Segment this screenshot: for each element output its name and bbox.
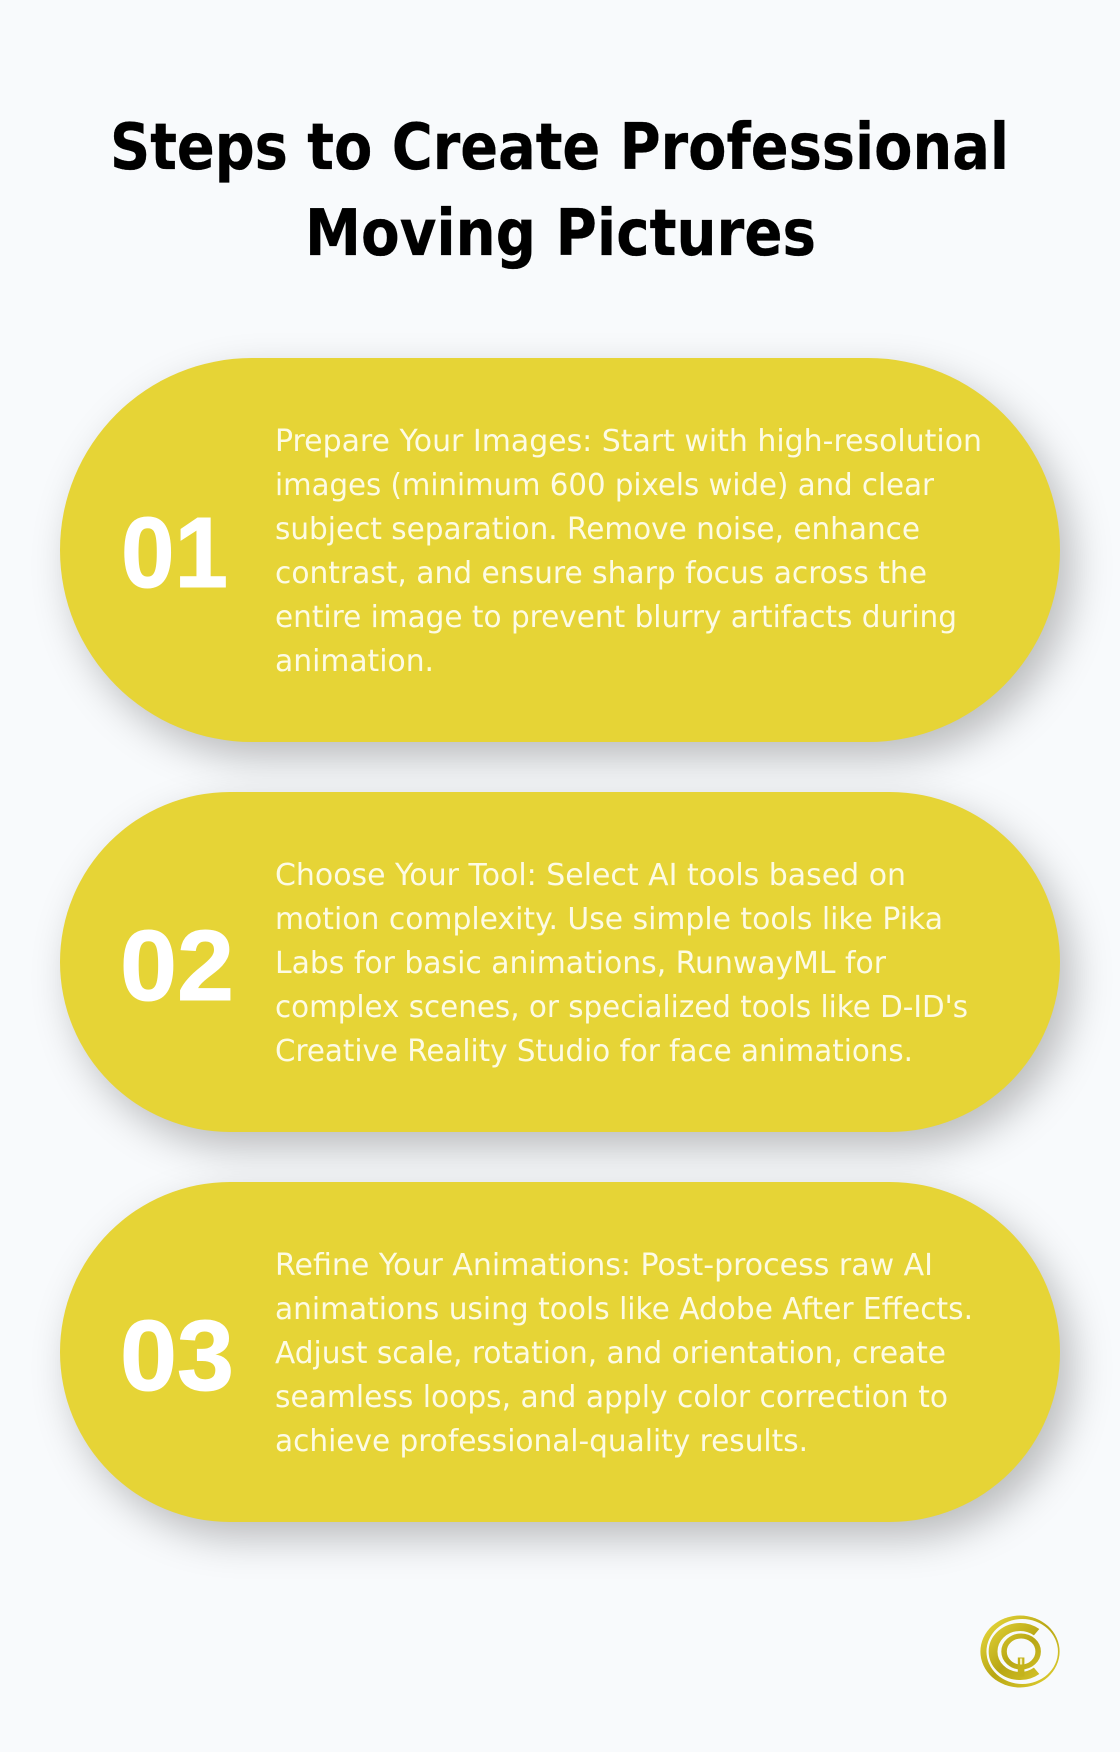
text: prepare your images: animation. — [275, 644, 434, 679]
text: prepare your images: entire image to prevent blurry artifacts during — [275, 600, 957, 635]
panel: step 03 — [60, 1182, 1060, 1522]
text: prepare your images: Prepare Your Images: Start with high-resolution — [275, 424, 982, 459]
title — [110, 111, 1009, 271]
text: prepare your images: subject separation. Remove noise, enhance — [275, 512, 920, 547]
panel: step 02 — [60, 792, 1060, 1132]
text: choose your tool: motion complexity. Use simple tools like Pika — [275, 902, 943, 937]
text: prepare your images: contrast, and ensure sharp focus across the — [275, 556, 927, 591]
text: prepare your images: images (minimum 600 pixels wide) and clear — [275, 468, 935, 503]
text: refine your animations: Adjust scale, rotation, and orientation, create — [275, 1336, 946, 1371]
text: refine your animations: seamless loops, and apply color correction to — [275, 1380, 948, 1415]
number 02: 02 — [120, 910, 234, 1022]
text: choose your tool: Choose Your Tool: Select AI tools based on — [275, 858, 906, 893]
number 01: 01 — [121, 497, 228, 609]
text: refine your animations: achieve professional-quality results. — [275, 1424, 808, 1459]
text: choose your tool: Creative Reality Studio for face animations. — [275, 1034, 913, 1069]
title: Steps to Create Professional — [110, 111, 1009, 185]
text: refine your animations — [275, 1248, 973, 1459]
text: refine your animations: Refine Your Animations: Post-process raw AI — [275, 1248, 933, 1283]
title: Moving Pictures — [305, 197, 816, 271]
number 03: 03 — [120, 1300, 234, 1412]
panel: step 01 — [60, 358, 1060, 742]
text: prepare your images — [275, 424, 982, 679]
text: choose your tool — [275, 858, 968, 1069]
text: refine your animations: animations using tools like Adobe After Effects. — [275, 1292, 973, 1327]
text: choose your tool: Labs for basic animations, RunwayML for — [275, 946, 887, 981]
text: choose your tool: complex scenes, or specialized tools like D-ID's — [275, 990, 968, 1025]
